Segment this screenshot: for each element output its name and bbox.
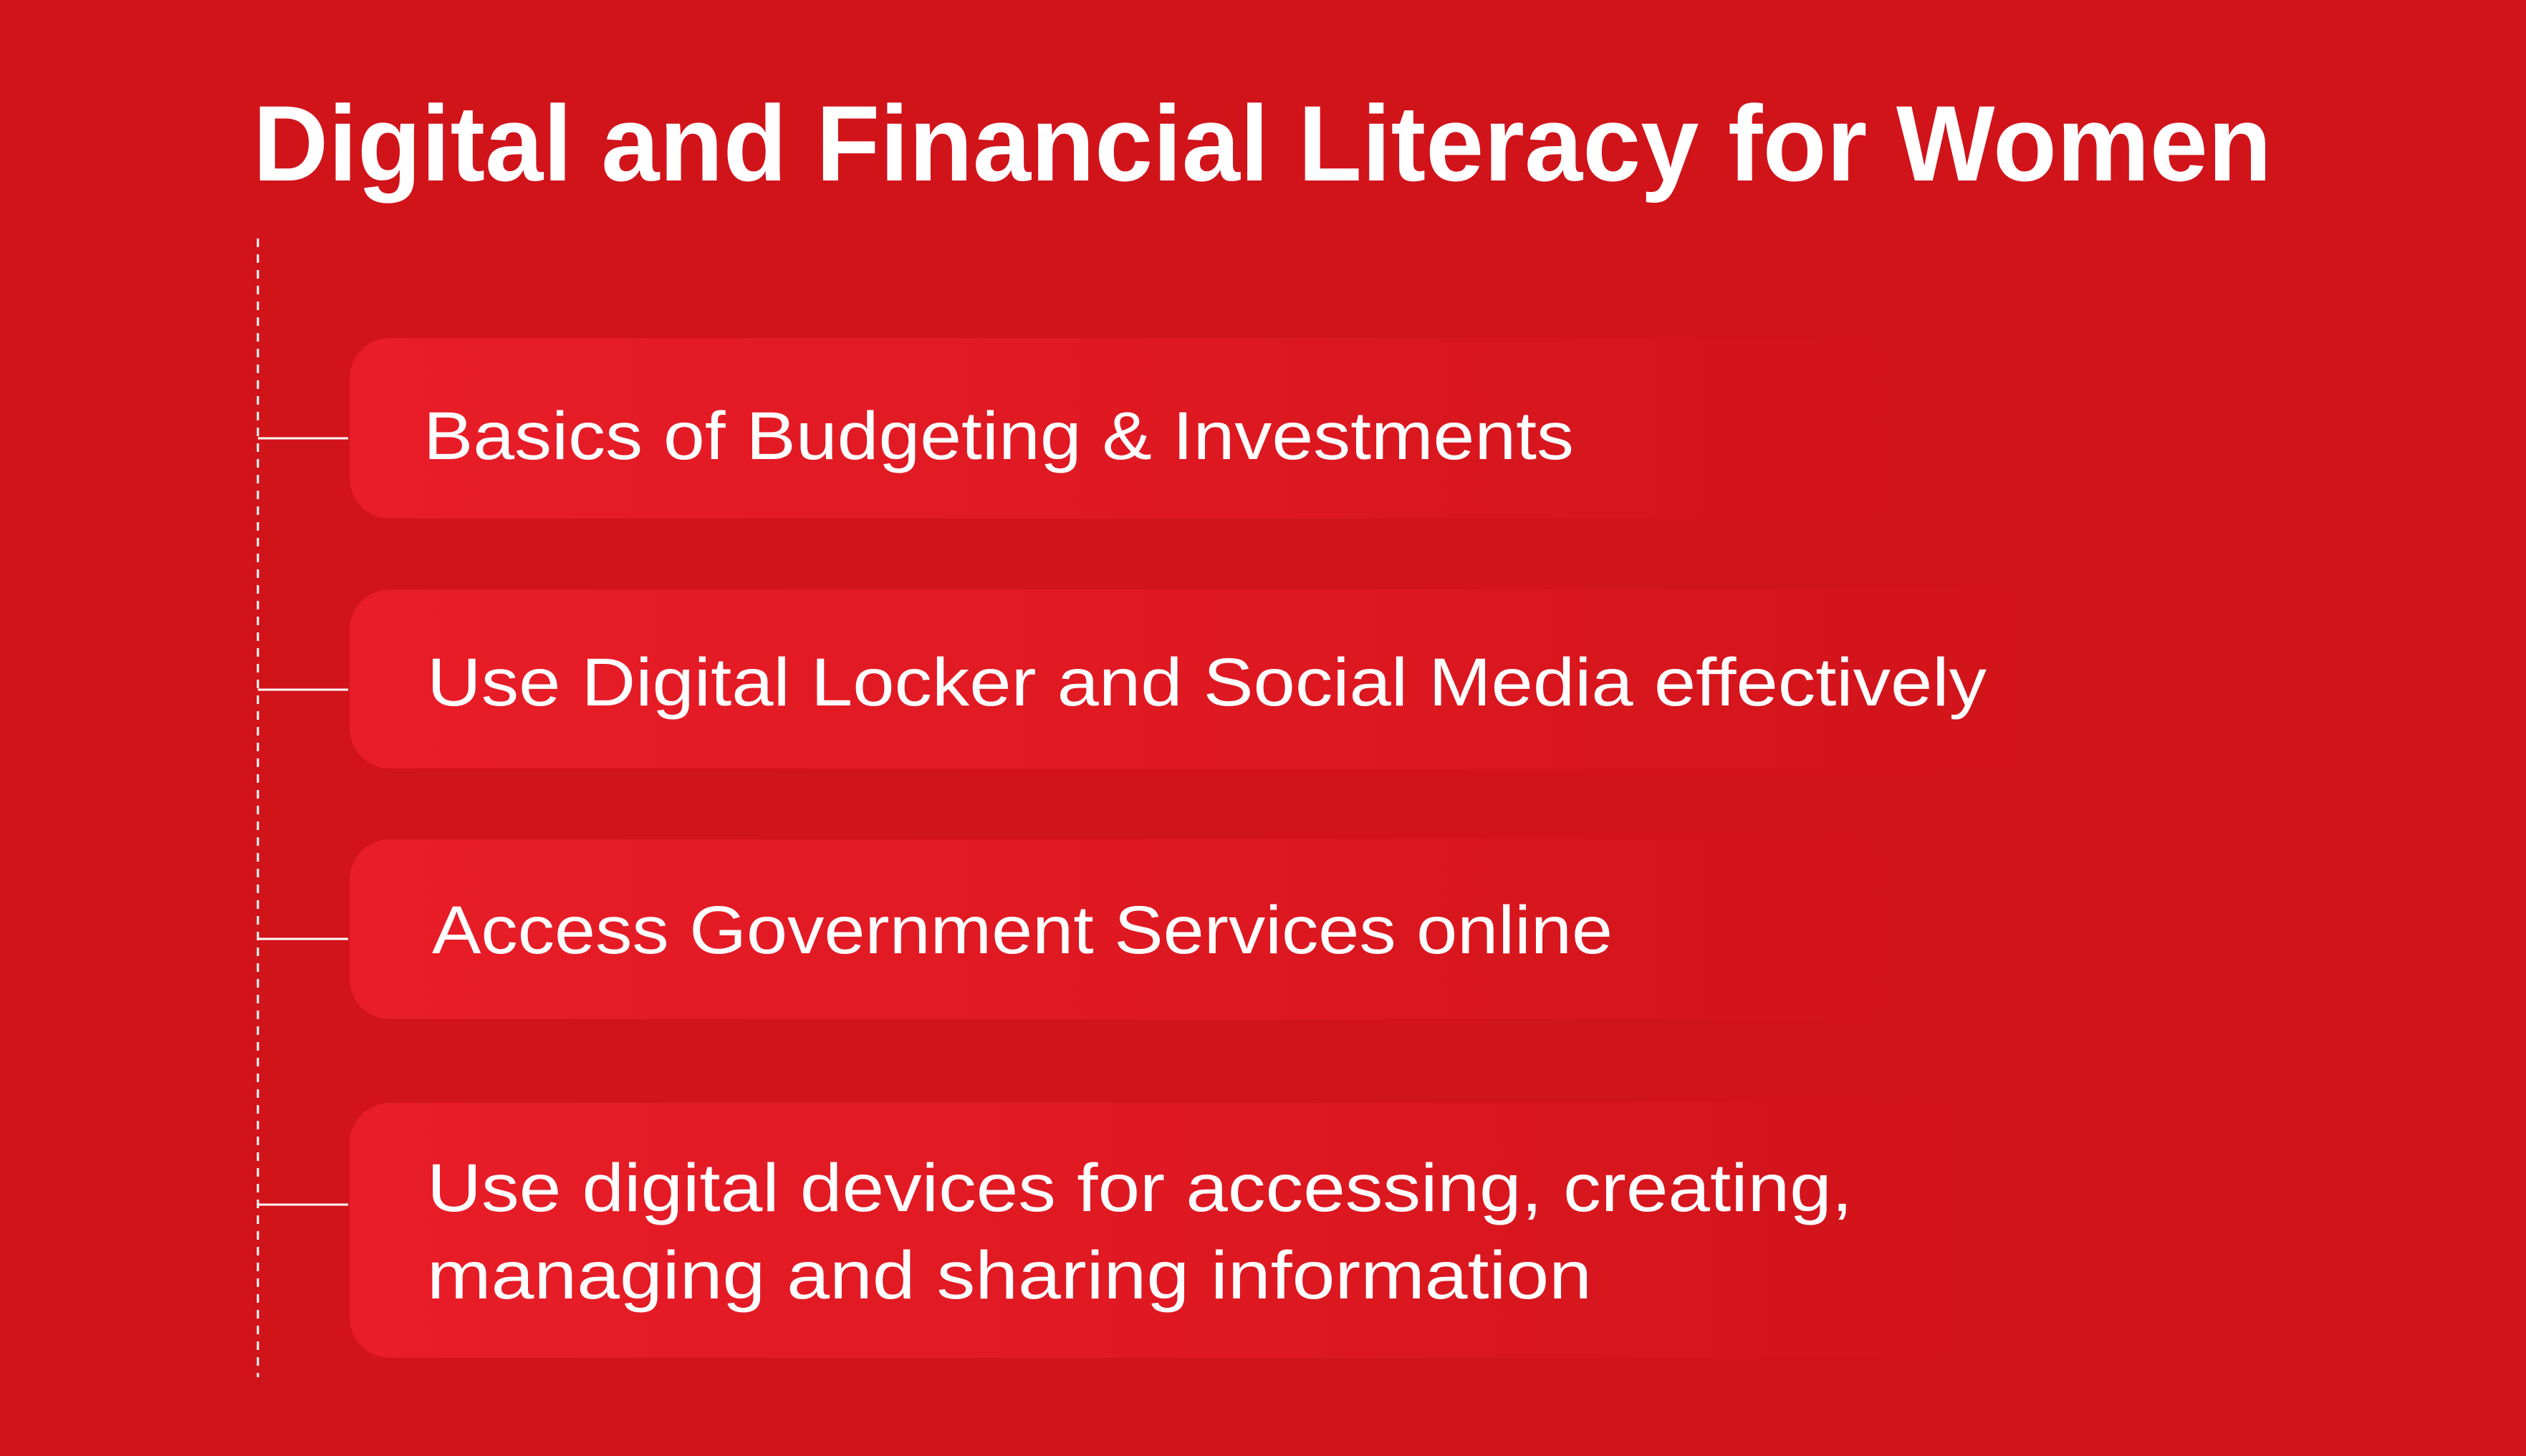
timeline: dashed vertical line [256, 238, 259, 1377]
item 4 [258, 1103, 1961, 1358]
item 1 [258, 338, 1890, 519]
title: Digital and Financial Literacy for Women [253, 83, 2272, 203]
item 2 [258, 589, 2033, 768]
item 3 [258, 839, 1890, 1019]
item 4: managing and sharing information [427, 1238, 1592, 1313]
item 3: Access Government Services online [432, 892, 1613, 968]
item 1: Basics of Budgeting & Investments [423, 398, 1574, 474]
item 4: Use digital devices for accessing, creating, [427, 1150, 1853, 1226]
item 2: Use Digital Locker and Social Media effectively [427, 645, 1987, 720]
